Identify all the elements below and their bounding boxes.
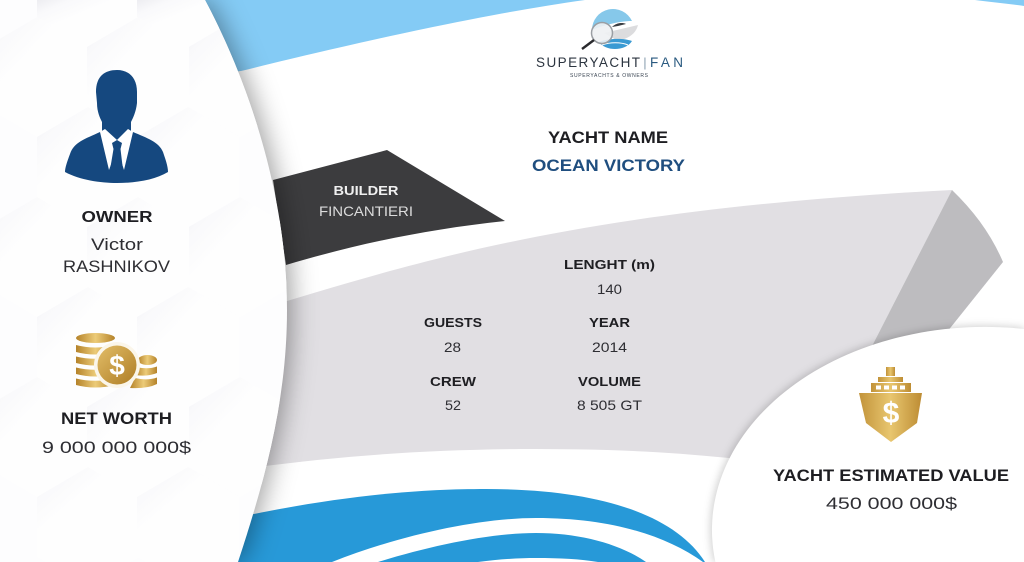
owner name: RASHNIKOV (63, 258, 170, 276)
value panel (712, 327, 1024, 562)
icon: gold coins (76, 333, 157, 388)
logo wordmark: SUPERYACHT (536, 55, 640, 70)
builder label: BUILDER (334, 183, 399, 198)
crew: CREW (430, 374, 477, 389)
year: YEAR (589, 315, 631, 330)
owner name: Victor (91, 236, 144, 254)
net worth value: 9 000 000 000$ (42, 438, 192, 457)
estimated value amount: 450 000 000$ (826, 494, 958, 513)
value panel shadow (710, 326, 1024, 562)
guests: 28 (444, 339, 461, 355)
logo wordmark: FAN (650, 55, 683, 70)
yacht name heading: YACHT NAME (548, 129, 668, 147)
logo (536, 9, 683, 79)
icon: gold ship: $ (883, 397, 900, 430)
hull bow (870, 190, 1003, 350)
year (589, 315, 631, 355)
logo tagline: SUPERYACHTS & OWNERS (570, 73, 649, 79)
yacht name value: OCEAN VICTORY (532, 156, 686, 175)
hull body (250, 190, 952, 470)
net worth label: NET WORTH (61, 410, 172, 428)
estimated value label: YACHT ESTIMATED VALUE (773, 467, 1009, 485)
guests: GUESTS (424, 315, 482, 330)
year: 2014 (592, 339, 627, 355)
length (564, 257, 655, 297)
builder value: FINCANTIERI (319, 203, 413, 219)
length: 140 (597, 281, 622, 297)
specs (424, 257, 655, 413)
crew (430, 374, 477, 413)
length: LENGHT (m) (564, 257, 655, 272)
light blue corner wave (975, 0, 1024, 6)
blue bottom wave (225, 489, 705, 562)
left panel (0, 0, 291, 562)
owner label: OWNER (82, 209, 153, 226)
icon: owner silhouette (65, 70, 168, 183)
hexagon pattern (37, 0, 286, 484)
crew: 52 (445, 397, 461, 413)
logo wordmark: | (643, 55, 647, 70)
left panel shadow (4, 0, 291, 562)
builder panel (273, 150, 505, 265)
owner name (63, 236, 170, 276)
icon: gold ship (859, 367, 922, 442)
guests (424, 315, 482, 355)
volume: 8 505 GT (577, 397, 642, 413)
logo emblem (582, 9, 638, 49)
icon: gold coins: $ (109, 350, 125, 381)
volume (577, 374, 642, 413)
volume: VOLUME (578, 374, 641, 389)
light blue top wave (190, 0, 585, 75)
